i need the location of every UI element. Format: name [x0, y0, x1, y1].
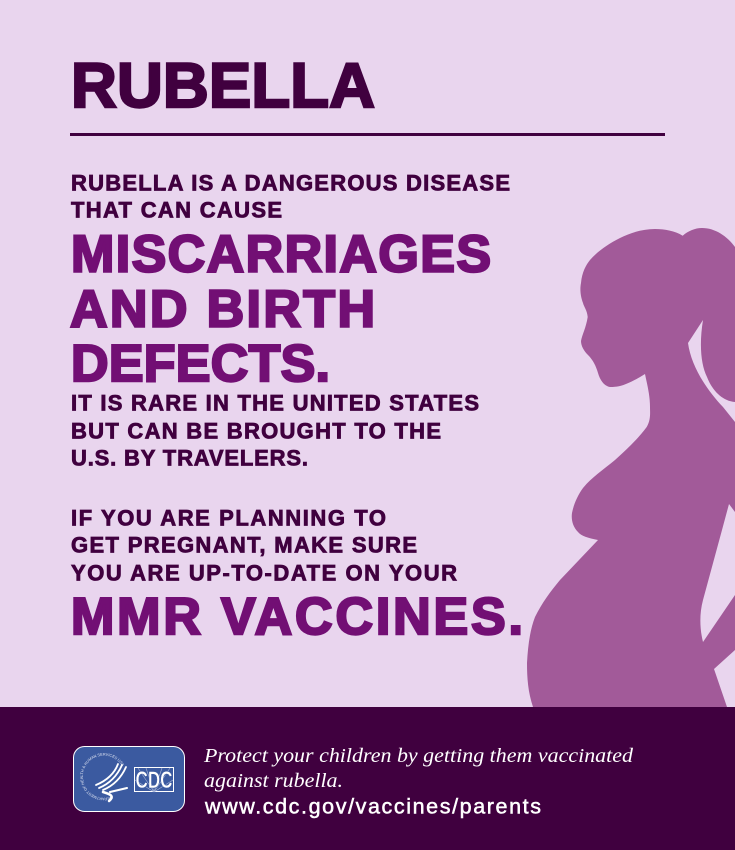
- logo: HHS and CDC: [73, 746, 185, 812]
- pregnancy advice text: IF YOU ARE PLANNING TO: [71, 506, 386, 530]
- title divider: [70, 133, 665, 136]
- headline: miscarriages and birth defects: AND BIRTH: [70, 280, 375, 338]
- rarity text: U.S. BY TRAVELERS.: [71, 446, 308, 470]
- footer band: [0, 707, 735, 850]
- pregnancy advice text: YOU ARE UP-TO-DATE ON YOUR: [71, 560, 457, 586]
- CDC mark: CDC: [136, 767, 172, 794]
- title: RUBELLA: [71, 51, 375, 121]
- headline: miscarriages and birth defects: [70, 226, 491, 393]
- pregnancy advice text: GET PREGNANT, MAKE SURE: [71, 532, 417, 558]
- headline: miscarriages and birth defects: MISCARRIAGES: [71, 226, 491, 284]
- footer message: Protect your children by getting them vaccinated: [203, 745, 634, 767]
- footer message: against rubella.: [204, 770, 343, 792]
- rarity text: [71, 390, 479, 470]
- intro text: [71, 170, 510, 222]
- pregnancy advice text: [71, 506, 457, 586]
- icon: HHS eagle: DEPARTMENT OF HEALTH & HUMAN SERVICES USA: [80, 753, 124, 800]
- rarity text: BUT CAN BE BROUGHT TO THE: [71, 418, 441, 444]
- footer message: [203, 745, 634, 792]
- headline: miscarriages and birth defects: DEFECTS.: [71, 335, 330, 393]
- headline: mmr vaccines: MMR VACCINES.: [71, 588, 523, 646]
- silhouette: pregnant woman: [527, 228, 735, 707]
- rarity text: IT IS RARE IN THE UNITED STATES: [71, 390, 479, 416]
- intro text: THAT CAN CAUSE: [71, 198, 282, 222]
- intro text: RUBELLA IS A DANGEROUS DISEASE: [71, 170, 510, 196]
- footer url: www.cdc.gov/vaccines/parents: [204, 794, 541, 818]
